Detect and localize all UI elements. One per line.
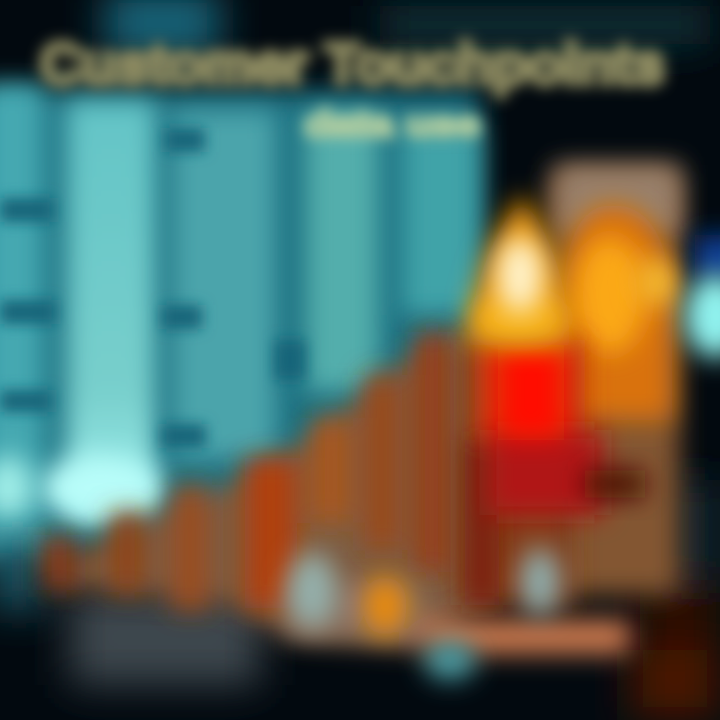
teal table panel: [0, 85, 480, 560]
base haze: [0, 480, 720, 720]
title: Customer Touchpoints: [40, 32, 665, 97]
rising orange bars: [42, 332, 448, 610]
highlights: [288, 548, 560, 680]
orange arch: [562, 205, 672, 420]
column: fifth: [402, 125, 480, 315]
bright bottom glow: [40, 456, 160, 520]
right edge glow: [684, 235, 720, 358]
red stripe: [465, 440, 499, 605]
title: data use: [305, 103, 480, 144]
bright red: [498, 345, 564, 440]
panel top: [556, 165, 680, 235]
bar 4: [245, 458, 297, 608]
base block: [290, 585, 630, 654]
dark red band: [585, 470, 645, 498]
row bands: [0, 128, 305, 448]
right tan panel: [550, 165, 680, 595]
red bar: [462, 340, 645, 605]
column: third: [172, 110, 276, 460]
title: [40, 32, 665, 144]
red bar base: [462, 340, 572, 605]
bar 6: [365, 375, 399, 550]
staircase backing: [60, 325, 490, 650]
crimson band: [488, 430, 603, 515]
bar 3: [172, 485, 208, 610]
teal panel base: [0, 90, 480, 560]
column: fourth: [305, 112, 379, 392]
column: second: [66, 100, 156, 520]
bar 7: [416, 332, 448, 572]
bar 1: [42, 535, 76, 590]
arch side glow: [637, 258, 677, 306]
bright left glow: [0, 456, 32, 520]
bar 2: [110, 512, 144, 592]
flame: [468, 195, 570, 345]
column: first: [0, 85, 44, 555]
arch core: [574, 237, 646, 353]
orange red edge: [475, 340, 585, 440]
panel body: [550, 170, 680, 595]
bar 5: [312, 418, 350, 523]
top glow: [105, 0, 710, 55]
